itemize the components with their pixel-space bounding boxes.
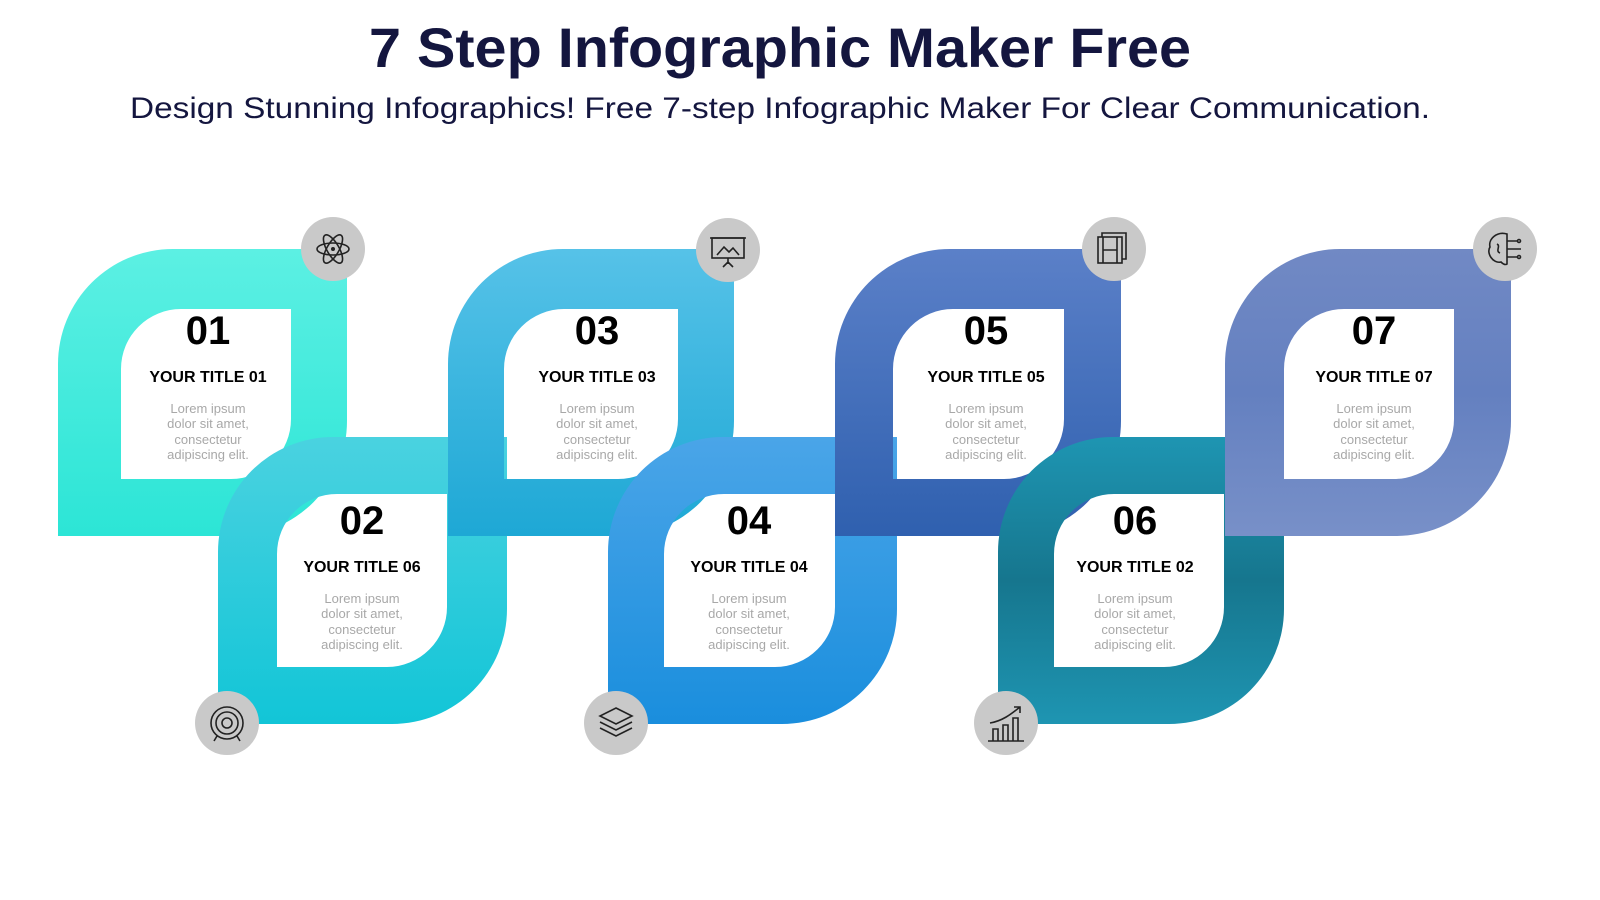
step 01: dolor sit amet, [167,416,249,431]
step 03: adipiscing elit. [556,447,638,462]
step 06 [998,437,1284,724]
step 02: dolor sit amet, [321,606,403,621]
step 07: YOUR TITLE 07 [1315,369,1433,386]
step 07: 07 [1352,309,1396,353]
step 03 [448,249,734,536]
icon: target [195,691,259,755]
step 03: 03 [575,309,619,353]
step 01: consectetur [174,432,242,447]
icon: film [1082,217,1146,281]
step 02: 02 [340,499,384,543]
step 01 [58,249,347,536]
step 06: adipiscing elit. [1094,637,1176,652]
title: 7 Step Infographic Maker Free [369,16,1191,79]
icon: growth chart [974,691,1038,755]
step 04: dolor sit amet, [708,606,790,621]
subtitle: Design Stunning Infographics! Free 7-step Infographic Maker For Clear Communication. [130,92,1430,125]
step 07: Lorem ipsum [1336,401,1412,416]
step 05: Lorem ipsum [948,401,1024,416]
step 03: Lorem ipsum [559,401,635,416]
icon: brain circuit [1473,217,1537,281]
step 06: consectetur [1101,622,1169,637]
step 01: 01 [186,309,230,353]
step 05: consectetur [952,432,1020,447]
step 04: Lorem ipsum [711,591,787,606]
step 02: consectetur [328,622,396,637]
step 07: consectetur [1340,432,1408,447]
step 02: YOUR TITLE 06 [303,559,421,576]
step 02: Lorem ipsum [324,591,400,606]
icon: presentation [696,218,760,282]
step 06: Lorem ipsum [1097,591,1173,606]
step 01: YOUR TITLE 01 [149,369,267,386]
step 07: adipiscing elit. [1333,447,1415,462]
step 04: 04 [727,499,772,543]
step 05: adipiscing elit. [945,447,1027,462]
step 07 [1225,249,1511,536]
step 02 [218,437,507,724]
icon: layers [584,691,648,755]
step 05: 05 [964,309,1008,353]
step 01: Lorem ipsum [170,401,246,416]
step 05 [835,249,1121,536]
step 04 [608,437,897,724]
step 03: YOUR TITLE 03 [538,369,656,386]
step 06: YOUR TITLE 02 [1076,559,1194,576]
step 04: YOUR TITLE 04 [690,559,808,576]
step 06: 06 [1113,499,1157,543]
step 04: consectetur [715,622,783,637]
step 02: adipiscing elit. [321,637,403,652]
step 06: dolor sit amet, [1094,606,1176,621]
step 03: consectetur [563,432,631,447]
step 03: dolor sit amet, [556,416,638,431]
icon: atom [301,217,365,281]
step 05: dolor sit amet, [945,416,1027,431]
step 01: adipiscing elit. [167,447,249,462]
step 05: YOUR TITLE 05 [927,369,1045,386]
step 04: adipiscing elit. [708,637,790,652]
step 07: dolor sit amet, [1333,416,1415,431]
